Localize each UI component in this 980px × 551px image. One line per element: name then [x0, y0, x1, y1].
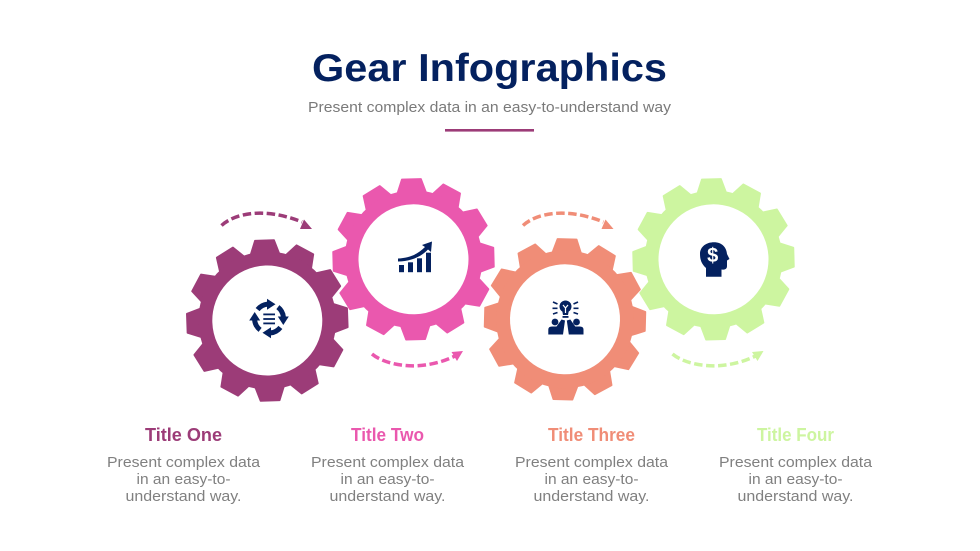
gear shape: green: [630, 176, 797, 342]
icon: head with dollar: [700, 242, 730, 277]
heading: title four: Title Four: [757, 425, 834, 445]
icon: head with dollar: $: [707, 245, 718, 267]
heading: title three: Title Three: [548, 425, 635, 445]
subtitle: Present complex data in an easy-to-understand way: [308, 99, 672, 116]
gear shape: pink: [330, 176, 497, 342]
gear four: green: [630, 176, 797, 342]
text block: title one: [107, 455, 261, 505]
heading: title two: Title Two: [351, 425, 424, 445]
column: title two: [311, 425, 465, 505]
arrow: purple: [222, 213, 312, 229]
text block: title three: [515, 455, 669, 505]
column: title four: [719, 425, 873, 505]
gear three: salmon: [482, 236, 648, 402]
text block: title three: Present complex data: [515, 455, 669, 471]
arrow: green: [672, 351, 764, 366]
text block: title three: in an easy-to-: [544, 472, 639, 488]
text block: title four: understand way.: [738, 489, 854, 505]
text block: title four: Present complex data: [719, 455, 873, 471]
text block: title one: understand way.: [126, 489, 242, 505]
text block: title two: in an easy-to-: [340, 472, 435, 488]
title: Gear Infographics: [312, 47, 667, 90]
text block: title three: understand way.: [534, 489, 650, 505]
icon: rising bar chart: [398, 242, 432, 272]
text block: title two: understand way.: [330, 489, 446, 505]
column: title three: [515, 425, 669, 505]
gear shape: salmon: [482, 236, 648, 402]
title underline: [445, 129, 534, 132]
column: title one: [107, 425, 261, 505]
gear one: purple: [184, 237, 351, 404]
icon: light bulb and two people: [548, 300, 584, 334]
text block: title one: Present complex data: [107, 455, 261, 471]
gear shape: purple: [184, 237, 351, 404]
icon: cycle with list: [249, 299, 289, 338]
arrow: pink: [372, 351, 463, 366]
text block: title two: [311, 455, 465, 505]
gear two: pink: [330, 176, 497, 342]
arrow: salmon: [523, 213, 614, 229]
text block: title four: [719, 455, 873, 505]
heading: title one: Title One: [145, 425, 222, 445]
text block: title four: in an easy-to-: [748, 472, 843, 488]
text block: title one: in an easy-to-: [136, 472, 231, 488]
text block: title two: Present complex data: [311, 455, 465, 471]
